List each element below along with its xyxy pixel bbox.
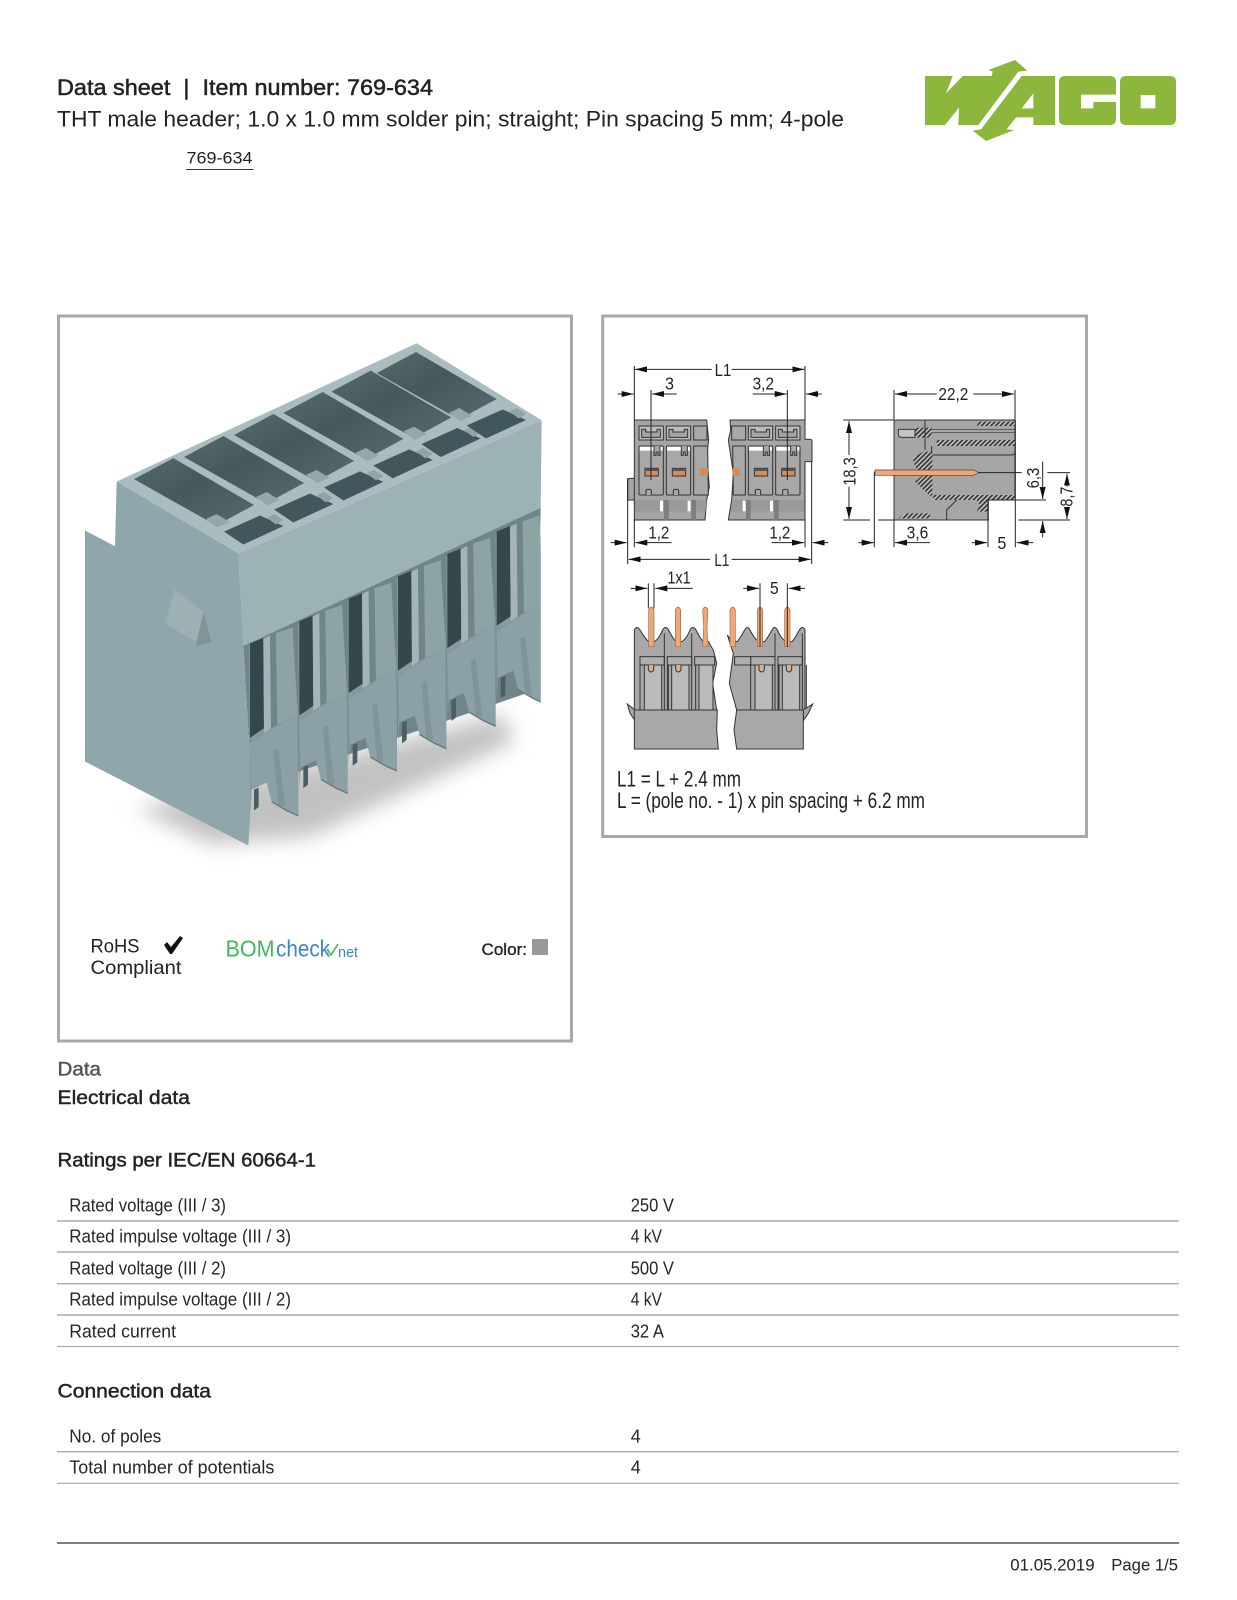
dimension 3,2: 3,2 <box>753 373 774 393</box>
panel: dimension drawing <box>603 316 1086 836</box>
table: ratings: 500 V <box>631 1258 674 1278</box>
dimension 18,3: 18,3 <box>840 457 860 486</box>
dimension 5: 5 <box>770 578 779 598</box>
table: ratings: Rated voltage (III / 3) <box>69 1196 226 1216</box>
table: connection data: Total number of potentials <box>69 1457 274 1477</box>
BOMcheck logo: BOM <box>226 936 274 962</box>
product photo: male header <box>85 343 545 846</box>
formula text: L = (pole no. - 1) x pin spacing + 6.2 mm <box>617 788 925 813</box>
dimension 3,6 <box>858 472 930 547</box>
dimension L1 bottom: L1 <box>714 550 729 570</box>
dimension 1x1: 1x1 <box>667 567 691 587</box>
table: ratings: 250 V <box>631 1195 674 1215</box>
icon: check mark <box>164 936 183 954</box>
dimension 5 <box>972 420 1033 553</box>
icon: WAGO logo <box>925 60 1176 141</box>
dimension 8,7: 8,7 <box>1057 487 1077 507</box>
BOMcheck logo: net <box>338 944 359 961</box>
color legend <box>482 939 548 959</box>
solder pins <box>649 607 790 647</box>
footer: Page 1/5 <box>1111 1555 1178 1574</box>
dimension 1,2 right <box>769 462 828 564</box>
dimension 3,6: 3,6 <box>907 522 928 542</box>
formula text <box>617 767 925 813</box>
heading: Connection data: Connection data <box>58 1381 211 1403</box>
dimension 1,2 right: 1,2 <box>769 522 790 542</box>
panel: product photo <box>58 316 572 1041</box>
RoHS compliant label: RoHS <box>90 935 140 957</box>
housing right <box>727 627 813 749</box>
color legend: Color: <box>482 940 527 959</box>
table: ratings: Rated impulse voltage (III / 2) <box>69 1289 291 1309</box>
formula text: L1 = L + 2.4 mm <box>617 767 741 792</box>
table: connection data: 4 <box>631 1457 641 1477</box>
table: connection data: 4 <box>631 1426 641 1446</box>
dimension 8,7 <box>1018 473 1077 520</box>
table: ratings: 4 kV <box>631 1227 662 1247</box>
table: ratings: 4 kV <box>631 1289 662 1309</box>
dimension 1x1 <box>631 567 693 608</box>
side section view <box>875 420 1015 520</box>
dimension 6,3: 6,3 <box>1023 468 1043 488</box>
footer <box>57 1543 1179 1574</box>
footer: 01.05.2019 <box>1010 1555 1095 1574</box>
RoHS compliant label <box>90 935 183 979</box>
dimension 3,2 <box>753 373 822 480</box>
subtitle: THT male header; 1.0 x 1.0 mm solder pin; straight; Pin spacing 5 mm; 4-pole <box>57 106 844 132</box>
BOMcheck logo <box>226 936 359 962</box>
dimension 22,2: 22,2 <box>938 384 968 404</box>
dimension 1,2 left: 1,2 <box>648 522 669 542</box>
item number link: 769-634 <box>186 148 252 167</box>
dimension 6,3 <box>978 462 1046 537</box>
dimension 18,3 <box>840 420 894 520</box>
dimension 5 <box>743 578 805 647</box>
table: connection data <box>57 1426 1179 1483</box>
section heading: Electrical data: Electrical data <box>58 1087 190 1109</box>
title: Data sheet | Item number: 769-634 <box>57 75 433 100</box>
connector body left <box>628 420 709 520</box>
housing left <box>627 627 718 749</box>
BOMcheck logo: check <box>276 936 330 962</box>
table: ratings: Rated impulse voltage (III / 3) <box>69 1227 291 1247</box>
front view drawing with dimensions <box>611 360 1077 570</box>
table: ratings: Rated current <box>69 1321 176 1341</box>
dimension 5: 5 <box>997 533 1006 553</box>
table: ratings: 32 A <box>631 1321 664 1341</box>
RoHS compliant label: Compliant <box>90 957 182 979</box>
table: ratings: Rated voltage (III / 2) <box>69 1258 226 1278</box>
table: connection data: No. of poles <box>69 1426 161 1446</box>
dimension 3: 3 <box>665 373 674 393</box>
table: ratings <box>57 1195 1179 1346</box>
dimension L1 top: L1 <box>715 360 731 380</box>
top view drawing with pins <box>627 567 813 749</box>
dimension 3 <box>618 373 677 480</box>
dimension 22,2 <box>894 384 1015 420</box>
section heading: Data: Data <box>58 1059 101 1081</box>
connector body right <box>728 420 812 520</box>
dimension 1,2 left <box>611 478 672 564</box>
heading: Ratings: Ratings per IEC/EN 60664-1 <box>58 1150 316 1172</box>
